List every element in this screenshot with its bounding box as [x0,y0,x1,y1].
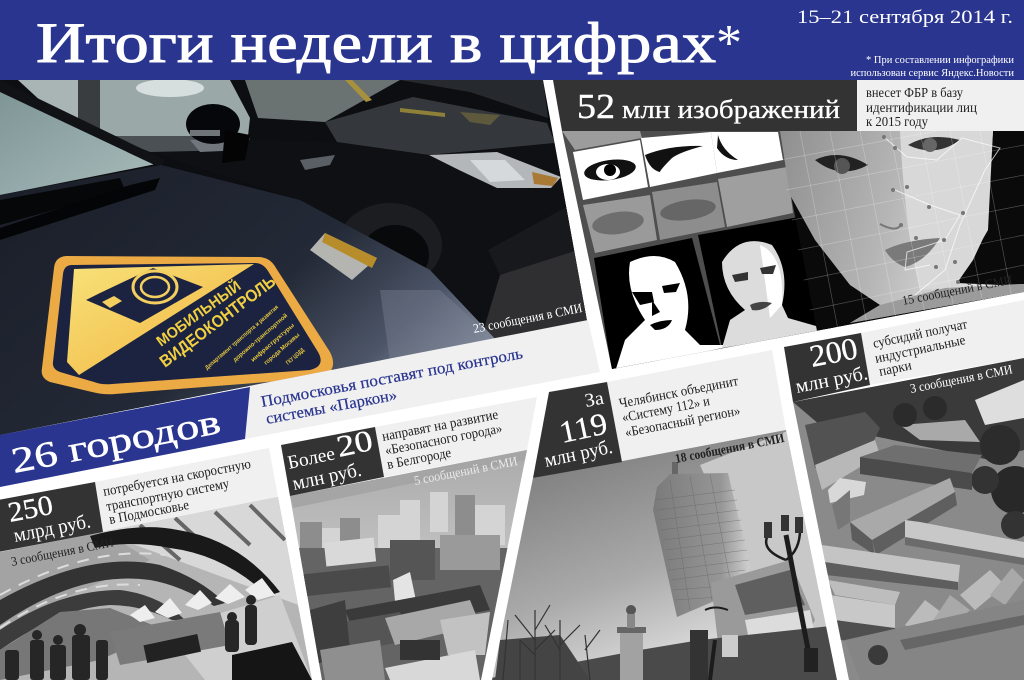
media mentions: 23: 23 сообщения в СМИ [472,300,584,336]
description text: направят на развитие [381,408,500,445]
description text: «Безопасного города» [384,421,504,459]
media mentions: 5: 5 сообщений в СМИ [413,453,519,488]
sign lettering: города Москвы [263,332,301,367]
number box 119: За [583,388,606,412]
number box 250: млрд руб. [12,510,93,547]
media mentions: 3: 3 сообщения в СМИ [909,361,1014,396]
media mentions: 18: 18 сообщения в СМИ [674,430,786,466]
number box 20: 20 [334,424,376,464]
photo: Chelyabinsk tower [480,425,850,680]
panel: 250 billion roubles, transit system [0,448,320,680]
number box 20: Более [286,443,337,474]
description text: в Подмосковье [108,498,190,528]
sign lettering: дорожно-транспортной [232,312,289,364]
description text: индустриальные [874,333,967,367]
camera pictogram [86,268,203,323]
photo: Belgorod city [290,450,527,680]
number box 200: млн руб. [794,362,870,398]
headline 26 cities: 26 городов [8,401,224,481]
sign lettering: инфраструктуры [250,322,296,364]
description text [872,317,969,380]
footnote about sources [850,55,1014,79]
description text [866,86,977,130]
number box 119: млн руб. [542,436,615,472]
sign lettering: ВИДЕОКОНТРОЛЬ [156,272,279,371]
description text [618,374,742,441]
panel: 200 million roubles, industrial parks [784,300,1024,680]
headline 52 million images: 52 [577,87,615,126]
header band [0,0,1024,80]
description text: идентификации лиц [866,101,977,116]
media mentions: 3: 3 сообщения в СМИ [10,534,115,569]
photo: industrial park aerial view [790,355,1024,680]
title: * [716,15,742,72]
sign lettering: МОБИЛЬНЫЙ [153,277,244,350]
description text [381,408,504,473]
date: 15–21 сентября 2014 г. [797,8,1013,28]
photo: transit station [0,490,320,680]
number box 20: млн руб. [290,459,364,495]
large face [780,131,1024,331]
description text: в Белгороде [386,446,453,473]
number box 119: 119 [556,406,610,450]
number box 200 [784,330,870,402]
icon: mobile video control sign [42,256,333,394]
description text: внесет ФБР в базу [866,86,963,101]
panel: over 20 million roubles, Belgorod [280,397,540,680]
number box 119 [533,382,622,478]
footnote about sources: * При составлении инфографики [866,55,1014,66]
footnote about sources: использован сервис Яндекс.Новости [850,68,1014,79]
panel: car photo with mobile video control sign [0,79,600,440]
description text: потребуется на скоростную [102,457,252,500]
panel: FBI 52 million images [553,80,1024,372]
sticker on hood [310,233,377,280]
sign lettering: Департамент транспорта и развития [204,304,280,372]
caption text: Подмосковья поставят под контроль [260,345,524,411]
photo: face recognition collage [555,115,1024,372]
description text: субсидий получат [872,317,969,352]
title: Итоги недели в цифрах [36,12,716,75]
caption text: системы «Паркон» [265,387,398,428]
panel: 119 million roubles, Chelyabinsk [480,350,850,680]
description text: к 2015 году [866,115,928,130]
description text: «Систему 112» и [621,394,712,426]
description text [102,457,252,528]
panel: caption band 26 cities [0,320,600,487]
description text: транспортную систему [105,477,231,515]
description text: парки [878,358,914,380]
number box 200: 200 [807,330,860,374]
media mentions: 15: 15 сообщений в СМИ [901,272,1014,308]
number box 20 [281,424,384,496]
sign lettering: ГКУ ЦОДД [285,347,306,367]
number box 250 [0,482,103,552]
number box 250: 250 [5,490,56,529]
headline 52 million images: млн изображений [622,95,840,124]
description text: «Безопасный регион» [624,404,742,441]
headline 52 million images [577,87,840,126]
description text: Челябинск объединит [618,374,740,412]
